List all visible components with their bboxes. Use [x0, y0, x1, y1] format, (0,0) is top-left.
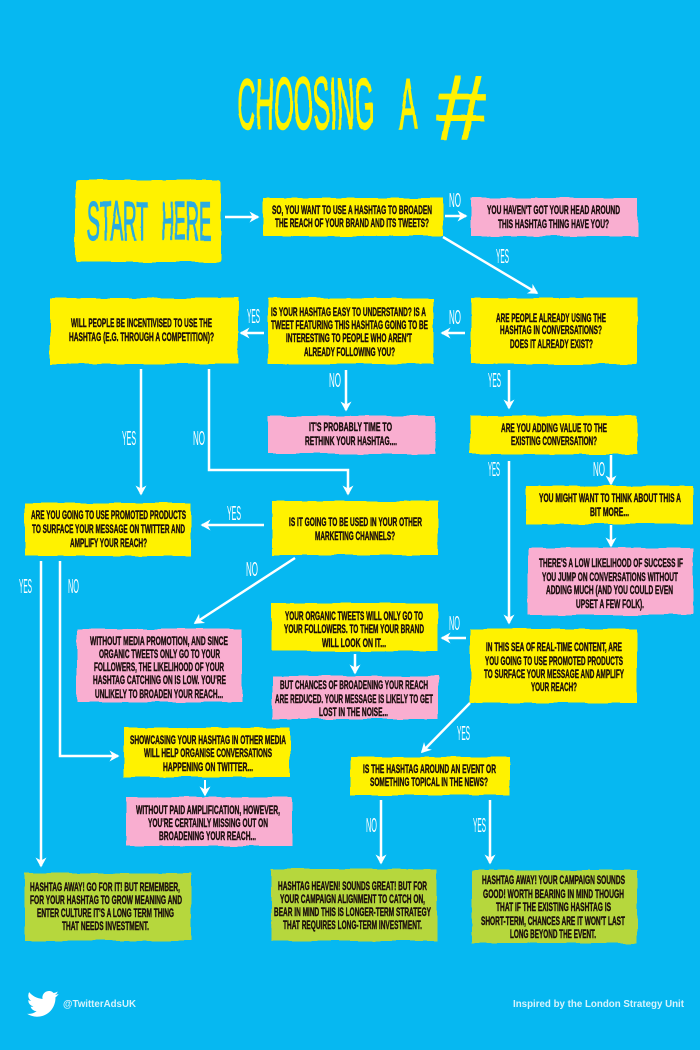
text: NO: [246, 559, 258, 581]
panel: chances reduced outcome: [272, 676, 438, 719]
panel: low likelihood outcome: UPSET A FEW FOLK).: [576, 599, 644, 611]
panel: hashtag away long term: THAT NEEDS INVESTMENT.: [62, 921, 149, 933]
panel: already using question: HASHTAG IN CONVERSATIONS?: [500, 325, 602, 337]
panel: broaden reach question: [263, 198, 443, 236]
panel: chances reduced outcome: ARE REDUCED. YOUR MESSAGE IS LIKELY TO GET: [275, 694, 433, 706]
panel: without paid amplification outcome: WITHOUT PAID AMPLIFICATION, HOWEVER,: [136, 805, 280, 817]
text: YES: [122, 428, 136, 450]
panel: without paid amplification outcome: BROADENING YOUR REACH...: [159, 831, 256, 843]
panel: hashtag heaven: [271, 869, 437, 941]
panel: broaden reach question: THE REACH OF YOUR BRAND AND ITS TWEETS?: [275, 218, 429, 230]
panel: incentivised question: WILL PEOPLE BE INCENTIVISED TO USE THE: [71, 318, 212, 330]
panel: think more: BIT MORE...: [590, 507, 629, 519]
panel: without media promotion outcome: [77, 629, 242, 702]
panel: easy to understand question: ALREADY FOLLOWING YOU?: [304, 347, 395, 359]
panel: hashtag heaven: HASHTAG HEAVEN! SOUNDS GREAT! BUT FOR: [278, 881, 427, 893]
panel: campaign sounds good: THAT IF THE EXISTING HASHTAG IS: [496, 902, 611, 914]
text: HERE: [161, 190, 211, 252]
title: [238, 57, 487, 159]
text: YES: [457, 723, 470, 745]
arrow: yes to campaign sounds good: [489, 800, 491, 863]
arrow: no to marketing channels: [209, 369, 348, 494]
panel: sea of real-time content question: YOUR REACH?: [531, 682, 577, 694]
panel: hashtag heaven: BEAR IN MIND THIS IS LONGER-TERM STRATEGY: [274, 907, 431, 919]
arrow: to low likelihood: [610, 525, 612, 546]
panel: rethink outcome: IT'S PROBABLY TIME TO: [309, 422, 392, 434]
text: YES: [496, 246, 509, 268]
arrow: to rethink: [345, 370, 347, 410]
text: NO: [449, 307, 461, 329]
text: NO: [366, 815, 377, 837]
panel: showcasing hashtag: WILL HELP ORGANISE CONVERSATIONS: [144, 748, 272, 760]
panel: organic tweets: [272, 603, 438, 651]
panel: low likelihood outcome: [528, 548, 693, 615]
arrow: to promoted products: [202, 524, 264, 526]
arrow: yes to hashtag away: [40, 561, 42, 866]
panel: hashtag away long term: FOR YOUR HASHTAG TO GROW MEANING AND: [30, 895, 182, 907]
title: A: [399, 65, 417, 145]
panel: other marketing channels question: IS IT GOING TO BE USED IN YOUR OTHER: [289, 517, 422, 529]
arrow: to chances reduced: [354, 654, 356, 673]
panel: hashtag away long term: HASHTAG AWAY! GO FOR IT! BUT REMEMBER,: [30, 882, 180, 894]
panel: organic tweets: YOUR FOLLOWERS. TO THEM YOUR BRAND: [284, 624, 424, 636]
arrow: to pink head around: [445, 215, 466, 217]
panel: campaign sounds good: LONG BEYOND THE EVENT.: [510, 929, 596, 941]
panel: adding value question: ARE YOU ADDING VALUE TO THE: [501, 423, 607, 435]
panel: campaign sounds good: [472, 870, 637, 943]
text: NO: [68, 576, 79, 598]
panel: event question: [351, 757, 510, 795]
panel: without media promotion outcome: WITHOUT MEDIA PROMOTION, AND SINCE: [90, 636, 228, 648]
arrow: start to broaden question: [225, 216, 258, 218]
panel: hashtag away long term: ENTER CULTURE IT'S A LONG TERM THING: [37, 908, 174, 920]
text: YES: [19, 576, 32, 598]
text: credit: Inspired by the London Strategy Unit: [513, 999, 685, 1010]
panel: organic tweets: YOUR ORGANIC TWEETS WILL ONLY GO TO: [285, 611, 423, 623]
arrow: to paid amplification: [204, 780, 206, 795]
panel: already using question: [471, 298, 637, 364]
arrow: to easy question: [442, 332, 465, 334]
panel: already using question: ARE PEOPLE ALREADY USING THE: [496, 313, 606, 325]
icon: twitter bird: [27, 991, 59, 1017]
panel: showcasing hashtag: SHOWCASING YOUR HASHTAG IN OTHER MEDIA: [130, 735, 286, 747]
panel: promoted products question: ARE YOU GOING TO USE PROMOTED PRODUCTS: [31, 510, 186, 522]
arrow: yes to sea of content: [508, 461, 510, 623]
panel: event question: IS THE HASHTAG AROUND AN EVENT OR: [363, 764, 496, 776]
panel: head around outcome: THIS HASHTAG THING HAVE YOU?: [498, 219, 609, 231]
panel: chances reduced outcome: LOST IN THE NOISE...: [319, 707, 388, 719]
panel: organic tweets: WILL LOOK ON IT...: [322, 638, 386, 650]
panel: showcasing hashtag: HAPPENING ON TWITTER...: [163, 762, 253, 774]
panel: adding value question: EXISTING CONVERSATION?: [511, 436, 597, 448]
panel: hashtag heaven: YOUR CAMPAIGN ALIGNMENT TO CATCH ON,: [280, 894, 425, 906]
text: YES: [488, 370, 501, 392]
arrow: no to showcasing: [60, 561, 118, 756]
panel: head around outcome: [471, 198, 638, 236]
title: CHOOSING: [238, 65, 374, 145]
text: NO: [449, 613, 460, 635]
panel: other marketing channels question: [272, 501, 438, 555]
panel: other marketing channels question: MARKETING CHANNELS?: [315, 531, 395, 543]
title: #: [435, 57, 487, 159]
panel: start here: START: [87, 190, 148, 252]
text: NO: [329, 370, 341, 392]
arrow: yes to promoted products: [140, 369, 142, 494]
panel: think more: [526, 486, 693, 524]
panel: without media promotion outcome: FOLLOWERS, THE LIKELIHOOD OF YOUR: [94, 662, 224, 674]
panel: incentivised question: [50, 298, 238, 364]
text: NO: [449, 190, 461, 212]
panel: chances reduced outcome: BUT CHANCES OF BROADENING YOUR REACH: [280, 680, 428, 692]
panel: without media promotion outcome: UNLIKELY TO BROADEN YOUR REACH...: [95, 689, 223, 701]
text: YES: [473, 815, 486, 837]
panel: rethink outcome: [268, 416, 436, 454]
panel: incentivised question: HASHTAG (E.G. THROUGH A COMPETITION)?: [69, 332, 214, 344]
panel: easy to understand question: TWEET FEATURING THIS HASHTAG GOING TO BE: [271, 320, 428, 332]
arrow: no to think more: [610, 455, 612, 484]
arrow: no to hashtag heaven: [380, 800, 382, 863]
panel: start here: [75, 180, 221, 262]
text: YES: [247, 306, 260, 328]
panel: without media promotion outcome: HASHTAG CATCHING ON IS LOW. YOU'RE: [93, 675, 226, 687]
arrow: yes diagonal: [443, 237, 537, 293]
panel: adding value question: [470, 416, 637, 454]
text: YES: [488, 459, 500, 481]
panel: showcasing hashtag: [124, 728, 290, 777]
panel: easy to understand question: IS YOUR HASHTAG EASY TO UNDERSTAND? IS A: [271, 307, 426, 319]
text: YES: [227, 503, 241, 525]
text: NO: [593, 459, 605, 481]
panel: without paid amplification outcome: YOU'RE CERTAINLY MISSING OUT ON: [148, 818, 268, 830]
panel: without paid amplification outcome: [126, 797, 292, 846]
panel: promoted products question: AMPLIFY YOUR REACH?: [70, 538, 147, 550]
panel: easy to understand question: [268, 298, 434, 364]
panel: promoted products question: TO SURFACE YOUR MESSAGE ON TWITTER AND: [32, 524, 185, 536]
arrow: no diagonal to media promotion: [195, 558, 295, 623]
text: NO: [193, 428, 205, 450]
arrow: to adding value: [508, 370, 510, 408]
text: twitter handle: @TwitterAdsUK: [63, 999, 137, 1010]
arrow: yes diagonal to event question: [422, 703, 470, 752]
panel: easy to understand question: INTERESTING TO PEOPLE WHO AREN'T: [286, 333, 412, 345]
arrow: to incentivised question: [241, 332, 264, 334]
panel: hashtag heaven: THAT REQUIRES LONG-TERM INVESTMENT.: [283, 920, 422, 932]
panel: sea of real-time content question: [470, 629, 637, 703]
panel: already using question: DOES IT ALREADY EXIST?: [510, 339, 593, 351]
panel: rethink outcome: RETHINK YOUR HASHTAG....: [305, 436, 397, 448]
panel: event question: SOMETHING TOPICAL IN THE NEWS?: [370, 777, 488, 789]
panel: promoted products question: [25, 503, 191, 556]
arrow: to organic tweets: [442, 637, 466, 639]
panel: without media promotion outcome: ORGANIC TWEETS ONLY GO TO YOUR: [99, 649, 220, 661]
panel: hashtag away long term: [25, 873, 191, 941]
panel: broaden reach question: SO, YOU WANT TO USE A HASHTAG TO BROADEN: [272, 205, 432, 217]
